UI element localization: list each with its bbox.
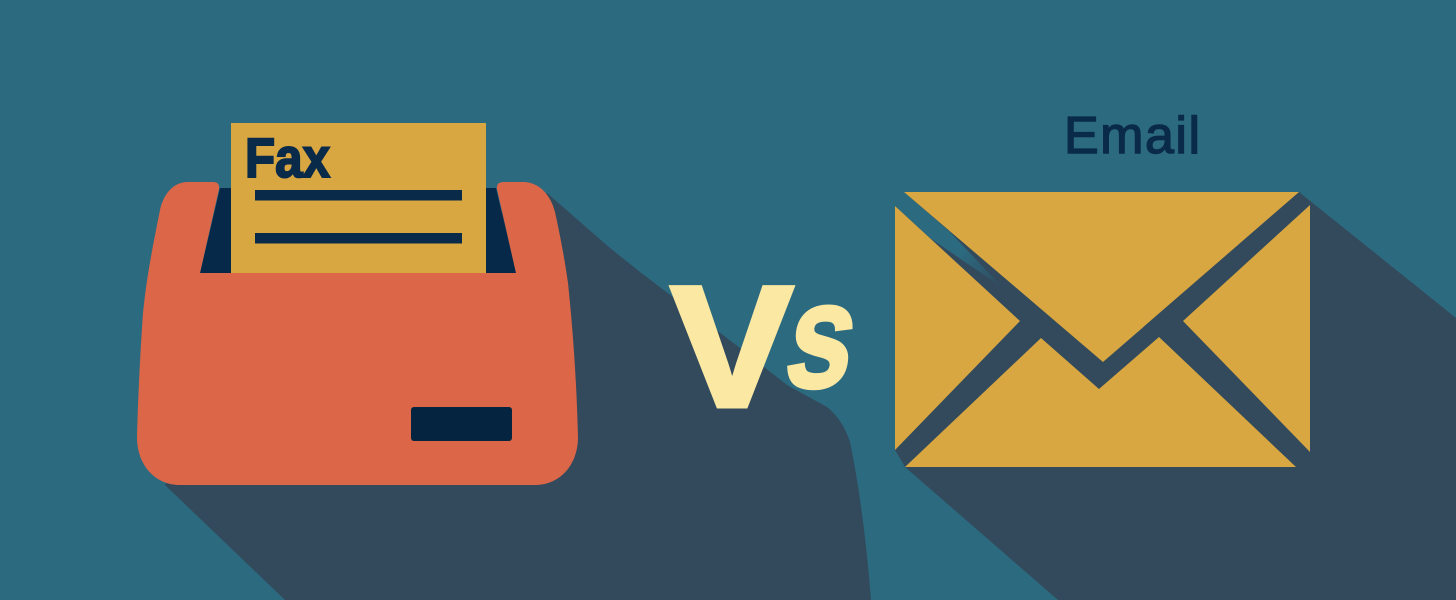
label: Email: Email (1064, 107, 1200, 165)
envelope gaps (895, 192, 1310, 467)
envelope (895, 192, 1310, 467)
fax machine body (137, 182, 578, 485)
left flap (895, 206, 1020, 450)
paper line 1 (255, 190, 462, 200)
paper line 2 (255, 233, 462, 244)
teal sliver in gap (895, 192, 1003, 288)
bottom flap (905, 337, 1296, 467)
long shadow: envelope (905, 192, 1456, 600)
heading: Vs (671, 251, 871, 443)
paper slot (200, 188, 516, 273)
right flap (1183, 205, 1310, 452)
letter V: V (671, 251, 793, 443)
label: Fax: Fax (245, 126, 330, 189)
fax button (411, 407, 512, 441)
long shadow: fax machine (165, 193, 871, 600)
paper sheet (231, 123, 486, 273)
letter s: s (775, 252, 871, 420)
paper background (231, 123, 486, 273)
top flap (904, 192, 1299, 362)
fax machine (137, 123, 578, 485)
